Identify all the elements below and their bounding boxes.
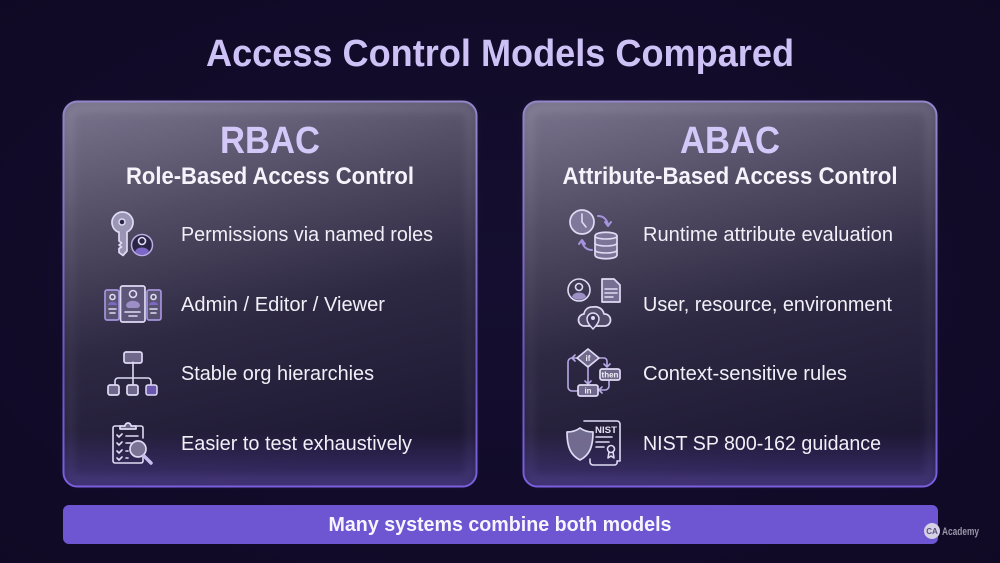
icon: clock and database xyxy=(570,210,617,259)
icon: if/then flow: then xyxy=(602,370,619,380)
icon: shield and NIST document: NIST xyxy=(595,425,618,435)
text: Context-sensitive rules: Context-sensitive rules xyxy=(643,363,847,385)
text: Admin / Editor / Viewer: Admin / Editor / Viewer xyxy=(181,294,385,316)
text: NIST SP 800-162 guidance: NIST SP 800-162 guidance xyxy=(643,433,881,455)
icon: user, document, cloud location xyxy=(568,279,620,329)
title: Access Control Models Compared xyxy=(206,33,794,75)
icon: if/then flow: if xyxy=(586,354,591,363)
panel: RBAC xyxy=(64,102,476,486)
icon: shield and NIST document xyxy=(567,421,620,465)
logo: Academy watermark xyxy=(924,523,980,539)
banner xyxy=(63,505,938,544)
icon: key with user xyxy=(112,212,152,256)
text: User, resource, environment: User, resource, environment xyxy=(643,294,892,316)
logo: Academy watermark: CA xyxy=(926,527,938,536)
icon: org hierarchy xyxy=(108,352,157,395)
subheading: Attribute-Based Access Control: Attribute-Based Access Control xyxy=(562,163,898,190)
text: Stable org hierarchies: Stable org hierarchies xyxy=(181,363,374,385)
text: Runtime attribute evaluation: Runtime attribute evaluation xyxy=(643,224,893,246)
logo: Academy watermark: Academy xyxy=(942,526,980,538)
banner text: Many systems combine both models xyxy=(328,514,672,536)
icon: role cards xyxy=(105,286,161,322)
heading: RBAC: RBAC xyxy=(220,120,320,162)
panel: ABAC xyxy=(524,102,936,486)
text: Easier to test exhaustively: Easier to test exhaustively xyxy=(181,433,412,455)
icon: if/then flow xyxy=(568,349,620,396)
subheading: Role-Based Access Control: Role-Based Access Control xyxy=(126,163,414,190)
text: Permissions via named roles: Permissions via named roles xyxy=(181,224,433,246)
icon: if/then flow: in xyxy=(584,386,592,396)
icon: clipboard with magnifier xyxy=(113,423,151,463)
heading: ABAC: ABAC xyxy=(680,120,780,162)
